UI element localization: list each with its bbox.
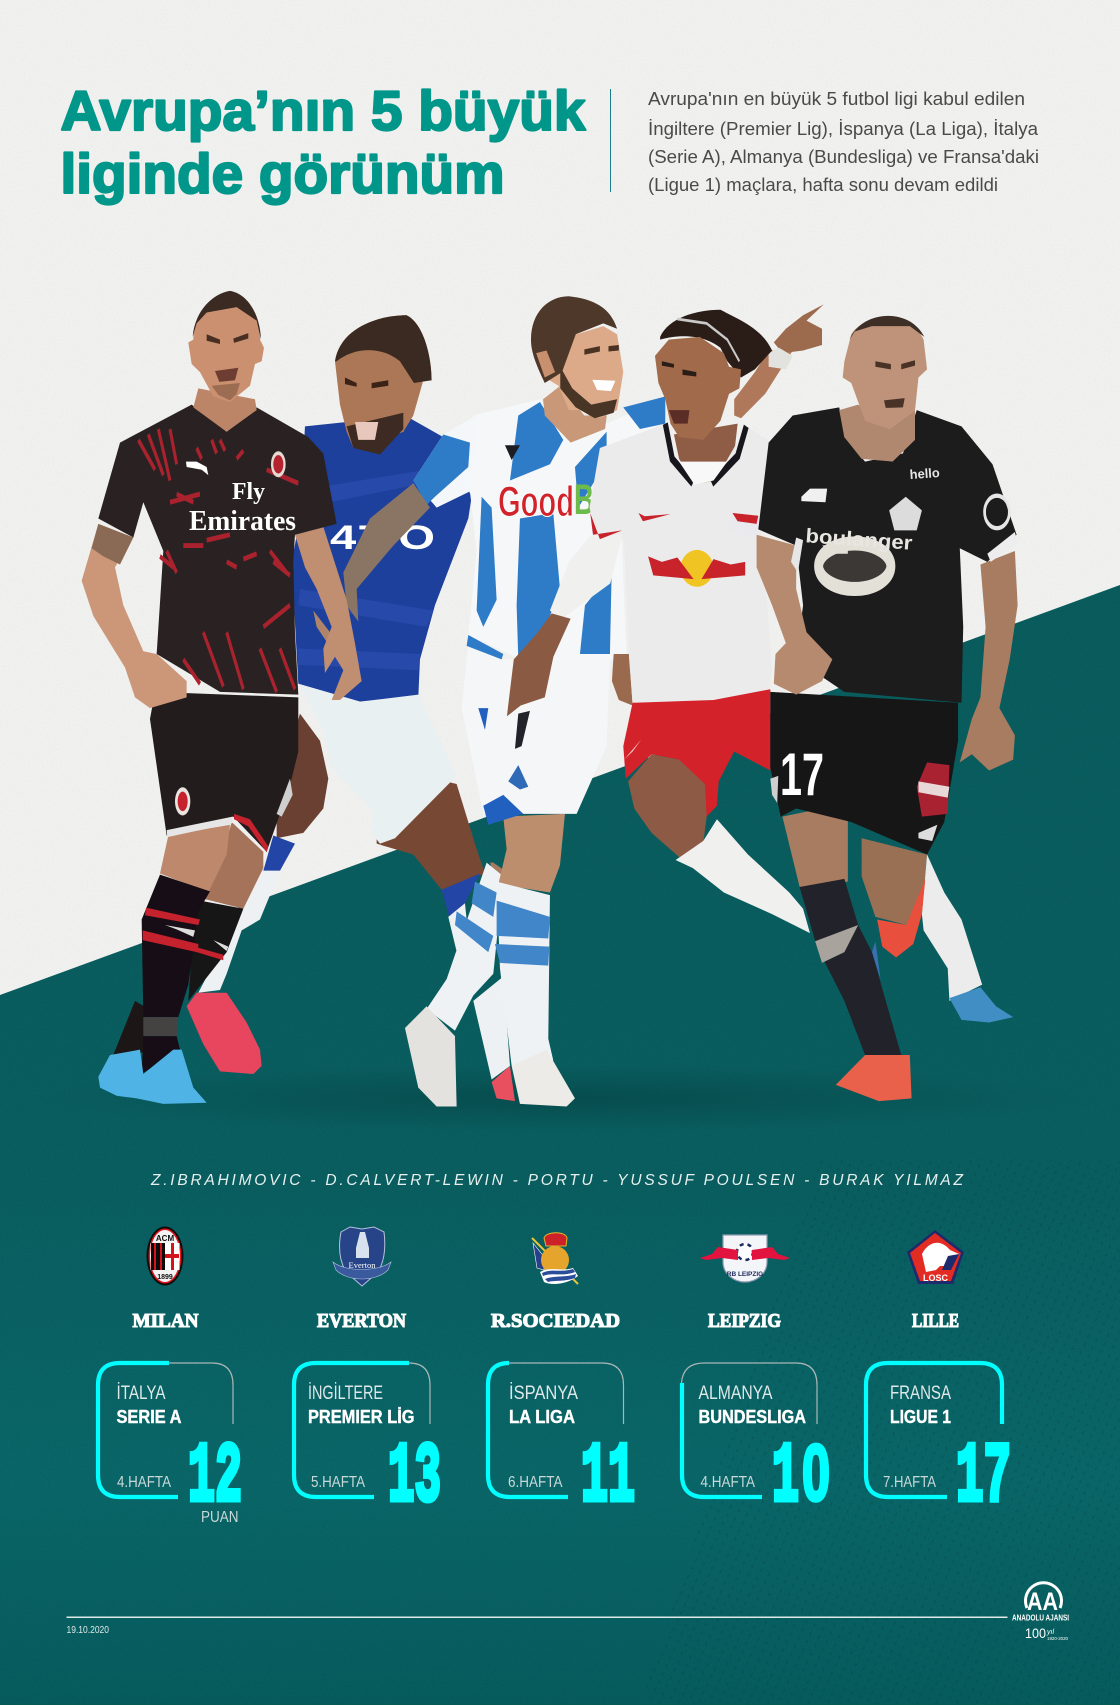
card: Everton: 13 <box>388 1431 441 1526</box>
intro text block: Avrupa'nın en büyük 5 futbol ligi kabul edilen <box>648 89 1025 109</box>
title: Avrupa’nın 5 büyük <box>60 79 586 142</box>
card: Real Sociedad: LA LIGA <box>509 1407 575 1427</box>
player: Portu, Real Sociedad <box>313 296 665 1107</box>
badge: Leipzig <box>700 1235 790 1282</box>
card: Real Sociedad <box>488 1363 635 1526</box>
card: Everton: 5.HAFTA <box>311 1474 366 1491</box>
title <box>60 79 586 205</box>
card: Lille: 17 <box>956 1431 1011 1526</box>
player: Poulsen, Leipzig <box>507 304 824 933</box>
intro text block: (Serie A), Almanya (Bundesliga) ve Fransa'daki <box>648 147 1039 167</box>
badge: Real Sociedad <box>532 1233 578 1284</box>
logo: Anadolu Ajansi: yıl <box>1046 1629 1054 1636</box>
logo: Anadolu Ajansi: 1920-2020 <box>1047 1636 1068 1641</box>
card: Lille: LIGUE 1 <box>890 1407 951 1427</box>
card: Milan: 4.HAFTA <box>117 1474 172 1491</box>
card: Everton <box>294 1363 441 1526</box>
badge: Lille <box>907 1230 964 1284</box>
logo: Anadolu Ajansi: 100 <box>1025 1625 1046 1641</box>
card: Lille: FRANSA <box>890 1383 951 1404</box>
logo: Anadolu Ajansi: AA <box>1027 1588 1058 1616</box>
club names: MILAN <box>132 1311 198 1332</box>
card: Everton: İNGİLTERE <box>308 1383 383 1404</box>
card: Real Sociedad: 11 <box>581 1431 635 1526</box>
player: Calvert-Lewin, Everton <box>187 315 515 1101</box>
card: Leipzig: ALMANYA <box>698 1383 773 1404</box>
Everton shirt sponsor: 4Z O <box>330 519 435 557</box>
card: Leipzig: 4.HAFTA <box>700 1474 756 1491</box>
badge: Leipzig: RB LEIPZIG <box>727 1271 763 1278</box>
card: Real Sociedad: İSPANYA <box>509 1383 578 1404</box>
Milan shirt sponsor: Fly <box>232 479 265 505</box>
badge: Everton: Everton <box>349 1260 376 1270</box>
card: Milan: SERIE A <box>116 1407 182 1427</box>
intro text block: İngiltere (Premier Lig), İspanya (La Liga), İtalya <box>648 119 1039 139</box>
Milan shirt sponsor <box>189 479 296 537</box>
logo: Anadolu Ajansi <box>1012 1583 1069 1641</box>
card: Milan <box>98 1363 242 1526</box>
Lille shirt hello lille: hello <box>909 465 940 482</box>
badge: Milan: 1899 <box>157 1274 173 1281</box>
badge: Milan: ACM <box>156 1234 174 1243</box>
club names: EVERTON <box>317 1311 406 1332</box>
title: liginde görünüm <box>60 142 504 205</box>
card: Lille: 7.HAFTA <box>883 1474 937 1491</box>
card: Leipzig <box>682 1363 830 1526</box>
player: Burak Yılmaz, Lille <box>757 316 1018 1101</box>
Real Sociedad sponsor: Good <box>498 478 574 526</box>
club names: LEIPZIG <box>708 1311 781 1332</box>
player: Ibrahimovic, Milan <box>82 291 362 1104</box>
card: Milan: 12 <box>188 1431 242 1526</box>
card: Leipzig: BUNDESLIGA <box>698 1407 806 1427</box>
badge: Milan <box>146 1226 184 1286</box>
title divider <box>610 89 611 192</box>
card: Milan: İTALYA <box>116 1383 166 1404</box>
card: Leipzig: 1 <box>772 1431 799 1526</box>
player names: Z.IBRAHIMOVIC - D.CALVERT-LEWIN - PORTU - YUSSUF POULSEN - BURAK YILMAZ <box>150 1172 964 1189</box>
card: Milan: PUAN <box>201 1509 238 1526</box>
Lille shirt number: 17 <box>780 741 824 808</box>
badge: Everton <box>333 1227 391 1286</box>
intro text block: (Ligue 1) maçlara, hafta sonu devam edildi <box>648 175 998 195</box>
logo: Anadolu Ajansi: ANADOLU AJANSI <box>1012 1613 1069 1623</box>
club names: LILLE <box>912 1311 959 1332</box>
Milan shirt sponsor: Emirates <box>189 505 296 537</box>
club names: R.SOCIEDAD <box>491 1311 620 1332</box>
Real Sociedad sponsor: B <box>574 476 594 524</box>
card: Lille <box>866 1363 1011 1526</box>
date: 19.10.2020 <box>66 1625 109 1636</box>
badge: Lille: LOSC <box>923 1273 948 1283</box>
footer rule <box>66 1616 1008 1618</box>
diagonal teal panel <box>0 585 1120 1705</box>
card: Real Sociedad: 6.HAFTA <box>508 1474 563 1491</box>
card: Leipzig: 0 <box>802 1428 830 1517</box>
card: Everton: PREMIER LİG <box>308 1407 414 1427</box>
intro text block <box>648 89 1039 195</box>
Lille shirt sponsor: boulanger <box>805 525 913 555</box>
club names <box>132 1311 959 1332</box>
